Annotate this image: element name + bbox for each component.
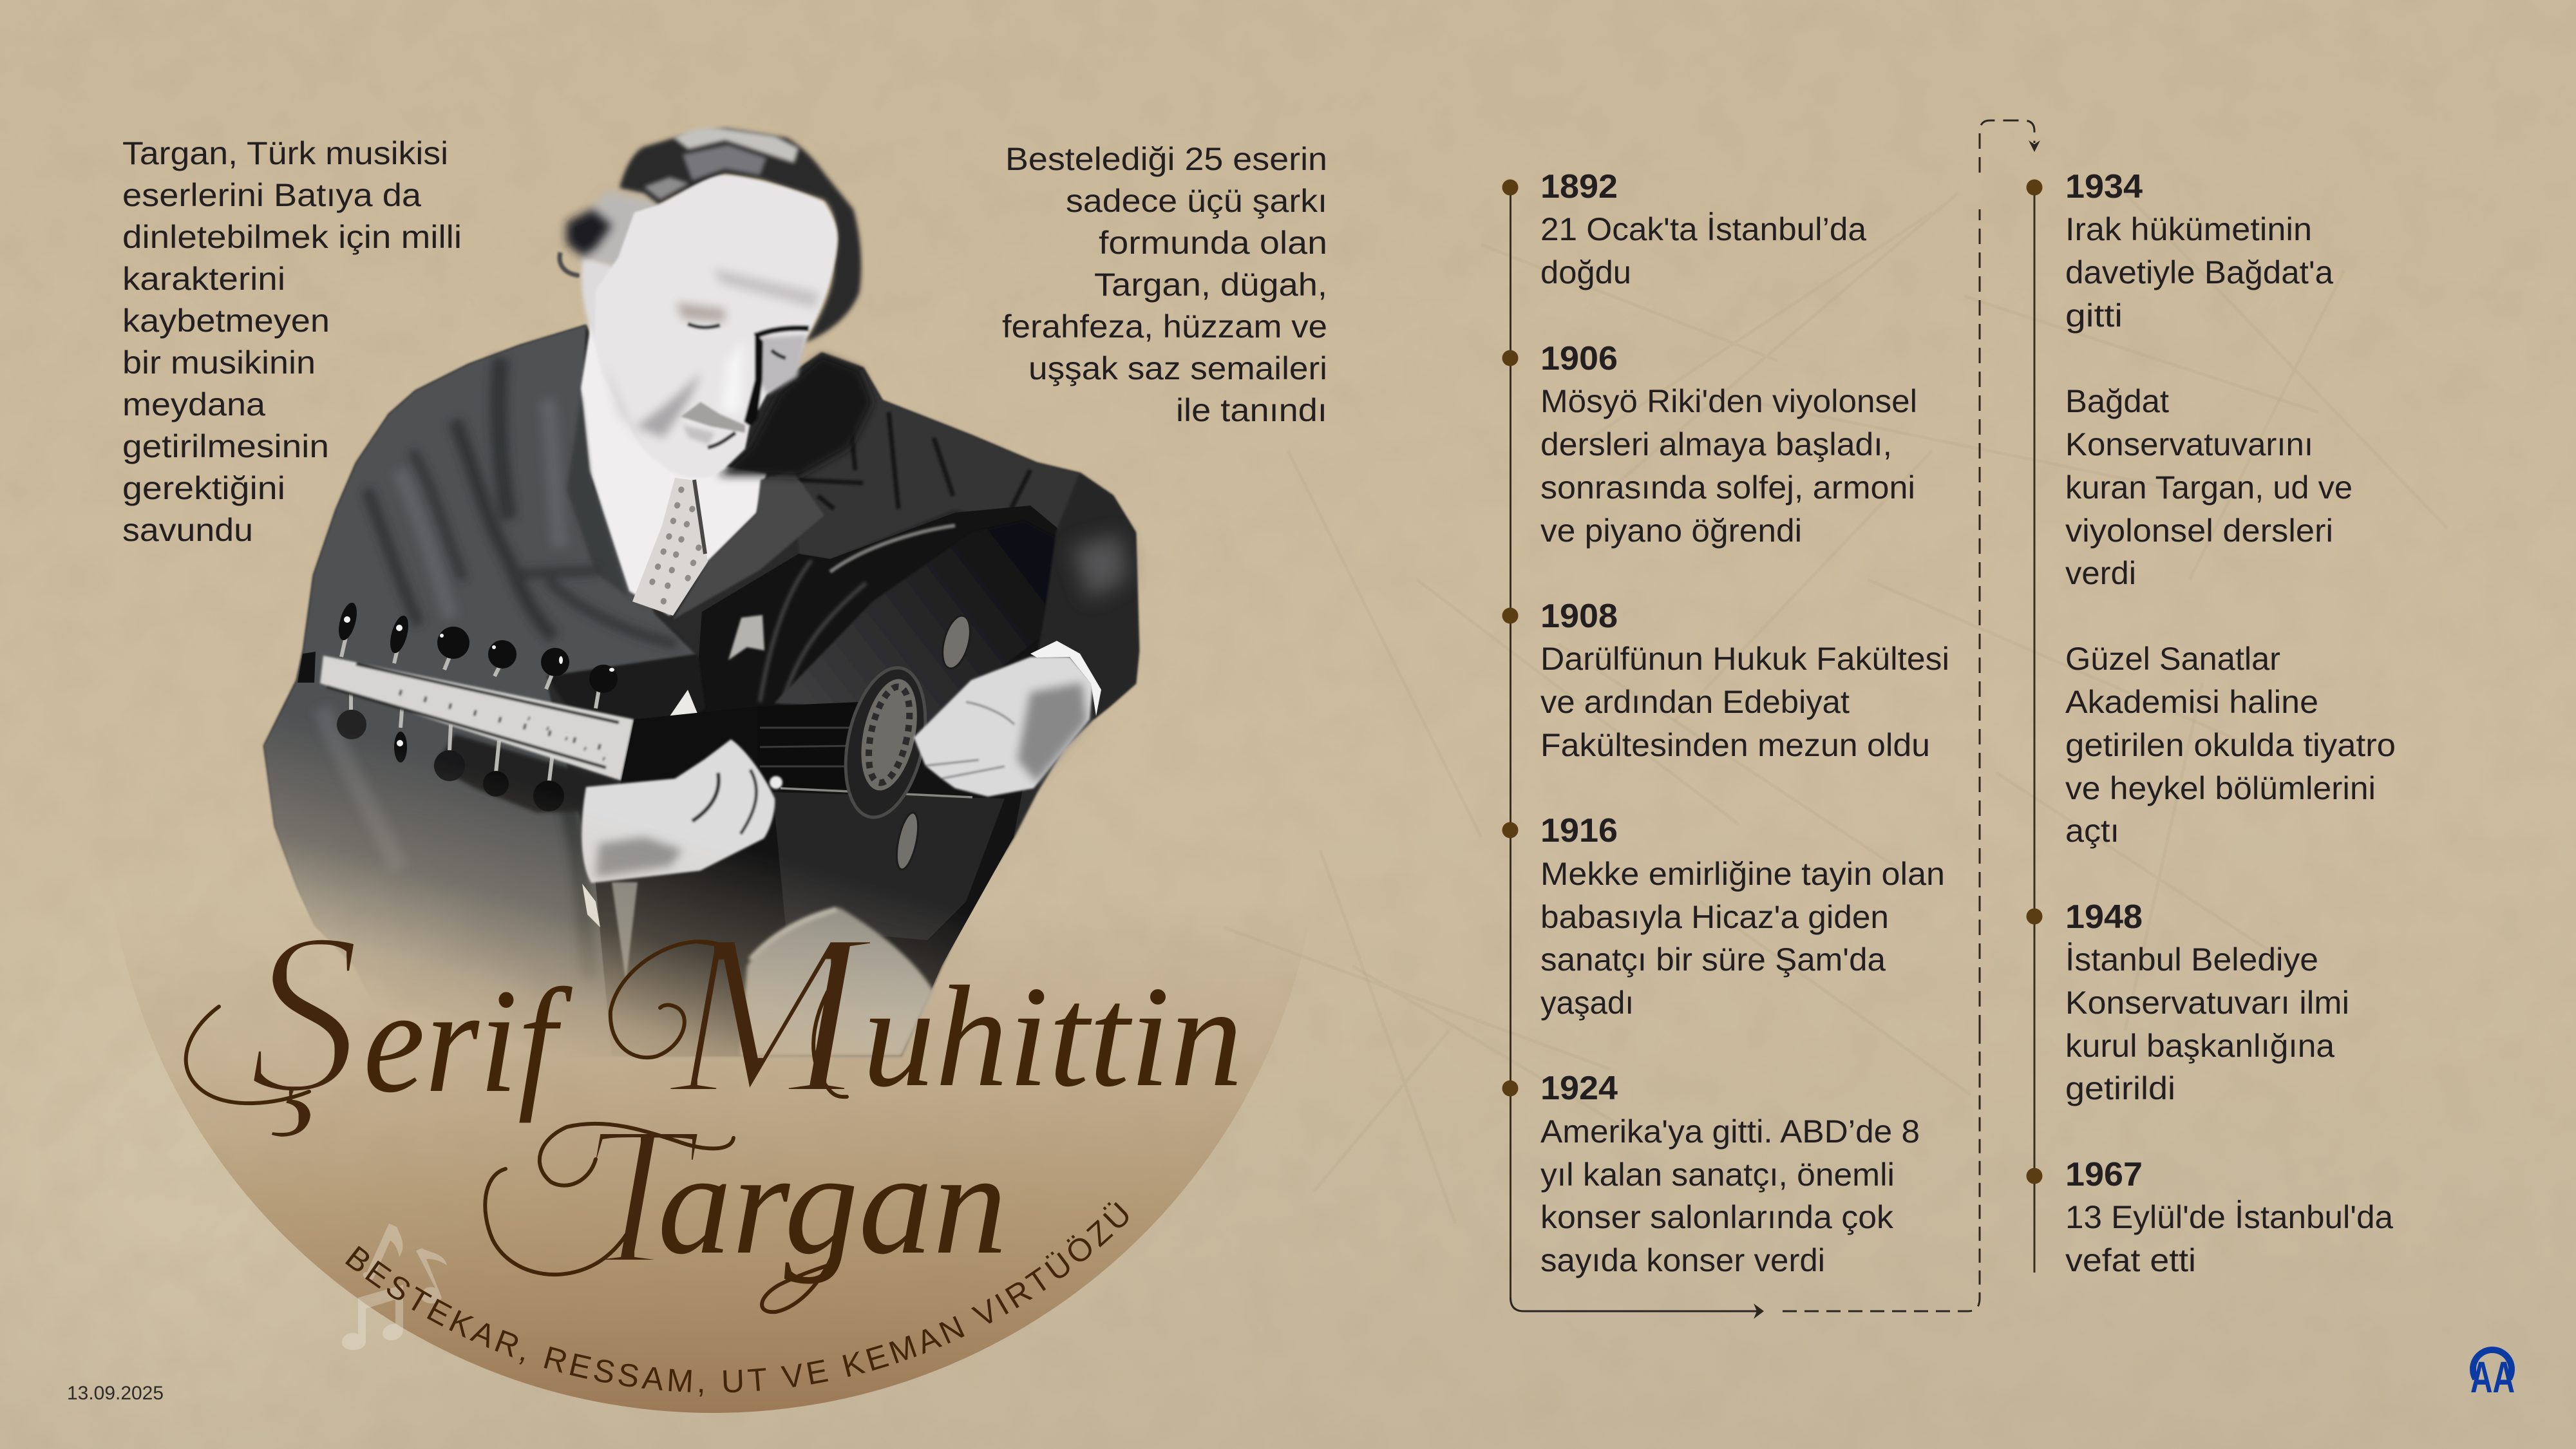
entry 1948: getirildi bbox=[2065, 1070, 2175, 1106]
entry 1892: doğdu bbox=[1540, 254, 1631, 290]
entry 1967: vefat etti bbox=[2065, 1242, 2196, 1278]
entry 1948 bbox=[2065, 898, 2349, 1106]
entry 1967: 13 Eylül'de İstanbul'da bbox=[2065, 1199, 2393, 1235]
entry 1908: Darülfünun Hukuk Fakültesi bbox=[1540, 641, 1949, 677]
entry 1906: sonrasında solfej, armoni bbox=[1540, 469, 1915, 506]
entry 1934: davetiyle Bağdat'a bbox=[2065, 254, 2333, 290]
subtitle on arc: BESTEKAR, RESSAM, UT VE KEMAN VIRTÜÖZÜ bbox=[345, 1202, 1128, 1396]
entry 1934: kuran Targan, ud ve bbox=[2065, 469, 2353, 506]
timeline line 2 bbox=[2034, 187, 2035, 1273]
beamed notes bbox=[342, 1285, 403, 1350]
text block: right quote: Targan, dügah, bbox=[1094, 267, 1327, 303]
face shadow on jacket bbox=[718, 355, 873, 477]
timeline dots 1 bbox=[1502, 179, 1519, 1096]
text block: left quote: eserlerini Batıya da bbox=[122, 177, 421, 213]
grey hair puff bbox=[573, 191, 670, 270]
left sleeve and chest bbox=[264, 325, 698, 1056]
text block: left quote: dinletebilmek için milli bbox=[122, 219, 462, 255]
text block: left quote: getirilmesinin bbox=[122, 428, 329, 464]
text block: left quote: kaybetmeyen bbox=[122, 303, 330, 339]
peg glints bbox=[344, 616, 614, 746]
text block: left quote: karakterini bbox=[122, 261, 285, 297]
sound holes bbox=[893, 613, 975, 871]
timeline dots 2 bbox=[2026, 179, 2043, 1184]
oud peg box bbox=[320, 656, 634, 781]
entry 1916: sanatçı bir süre Şam'da bbox=[1540, 942, 1886, 978]
arrow: timeline connector between columns bbox=[1511, 120, 2040, 1319]
right hand bbox=[914, 657, 1093, 797]
decorative flourishes of the title bbox=[186, 942, 847, 1103]
entry 1908: 1908 bbox=[1540, 598, 1618, 635]
letters argan: argan bbox=[658, 1122, 1007, 1285]
lower oud body bbox=[773, 792, 1005, 940]
entry 1934: açtı bbox=[2065, 813, 2119, 849]
jacket highlights bbox=[322, 399, 560, 869]
nose shadow bbox=[744, 332, 763, 426]
entry 1924: yıl kalan sanatçı, önemli bbox=[1540, 1157, 1895, 1193]
entry 1934: 1934 bbox=[2065, 168, 2143, 205]
jacket folds bbox=[367, 358, 676, 979]
entry 1967: 1967 bbox=[2065, 1156, 2143, 1193]
shirt bbox=[581, 322, 766, 616]
timeline line 1 bbox=[1510, 187, 1511, 1298]
moustache bbox=[681, 402, 745, 433]
peg on far end bbox=[298, 652, 316, 683]
text block: left quote: Targan, Türk musikisi bbox=[122, 135, 448, 171]
oud highlight arc bbox=[830, 526, 955, 572]
right cuff bbox=[1030, 641, 1101, 716]
grey hair highlights bbox=[674, 128, 799, 163]
entry 1934: getirilen okulda tiyatro bbox=[2065, 727, 2396, 763]
white triangle bbox=[668, 690, 699, 718]
entry 1924: Amerika'ya gitti. ABD’de 8 bbox=[1540, 1113, 1920, 1150]
text block: right quote: sadece üçü şarkı bbox=[1066, 183, 1327, 219]
upper right jacket bbox=[797, 368, 1080, 559]
text block: left quote: gerektiğini bbox=[122, 470, 285, 506]
dark area under peg box bbox=[435, 734, 618, 813]
lower lip shading bbox=[683, 425, 715, 444]
single note right bbox=[416, 1248, 447, 1303]
single note left bbox=[363, 1224, 403, 1280]
decorative flourishes of T and g bbox=[485, 1124, 837, 1312]
entry 1924: 1924 bbox=[1540, 1070, 1618, 1107]
entry 1948: Konservatuvarı ilmi bbox=[2065, 985, 2349, 1021]
entry 1916: Mekke emirliğine tayin olan bbox=[1540, 856, 1945, 892]
mouth bbox=[708, 433, 735, 448]
icon: AA logo bbox=[2470, 1350, 2515, 1402]
peg stems bbox=[341, 634, 599, 786]
entry 1934: Güzel Sanatlar bbox=[2065, 641, 2280, 677]
entry 1916 bbox=[1540, 812, 1945, 1021]
entry 1948: 1948 bbox=[2065, 898, 2143, 936]
entry 1934: Akademisi haline bbox=[2065, 684, 2318, 720]
text block: left quote bbox=[122, 135, 462, 548]
chest streaks bbox=[760, 560, 866, 702]
entry 1916: yaşadı bbox=[1540, 985, 1634, 1021]
entry 1948: İstanbul Belediye bbox=[2065, 942, 2318, 978]
entry 1924: konser salonlarında çok bbox=[1540, 1199, 1894, 1235]
letters erif: erif bbox=[363, 958, 573, 1124]
text block: left quote: meydana bbox=[122, 386, 265, 422]
ear bbox=[582, 258, 628, 341]
title: Targan bbox=[485, 1085, 1007, 1312]
knee bbox=[741, 908, 934, 1056]
text block: right quote: formunda olan bbox=[1099, 225, 1327, 261]
right jacket folds bbox=[797, 412, 1030, 509]
coat edge strip bbox=[612, 882, 638, 982]
text block: right quote: ile tanındı bbox=[1176, 392, 1327, 428]
entry 1934: verdi bbox=[2065, 555, 2136, 591]
icon: music notes bbox=[342, 1224, 447, 1350]
timeline column 2 bbox=[2026, 168, 2396, 1278]
entry 1934: Konservatuvarını bbox=[2065, 426, 2313, 462]
icon: AA logo: AA bbox=[2470, 1352, 2515, 1402]
fret neck to left hand shadow bbox=[621, 706, 757, 790]
entry 1934: Bağdat bbox=[2065, 383, 2169, 419]
entry 1906: Mösyö Riki'den viyolonsel bbox=[1540, 383, 1917, 419]
entry 1908: ve ardından Edebiyat bbox=[1540, 684, 1850, 720]
entry 1906 bbox=[1540, 340, 1917, 549]
entry 1934: viyolonsel dersleri bbox=[2065, 513, 2333, 549]
pocket square bbox=[728, 615, 764, 660]
left hand bbox=[582, 739, 782, 883]
letters Ş: Ş bbox=[248, 884, 361, 1142]
letter T: T bbox=[580, 1085, 703, 1306]
entry 1906: dersleri almaya başladı, bbox=[1540, 426, 1892, 462]
entry 1908: Fakültesinden mezun oldu bbox=[1540, 727, 1930, 763]
letters uhittin: uhittin bbox=[862, 956, 1243, 1117]
sleeve highlight bbox=[1072, 535, 1127, 599]
face bbox=[594, 175, 837, 478]
entry 1892: 21 Ocak'ta İstanbul’da bbox=[1540, 211, 1866, 247]
entry 1924 bbox=[1540, 1070, 1920, 1278]
text block: left quote: bir musikinin bbox=[122, 345, 316, 381]
text block: right quote: ferahfeza, hüzzam ve bbox=[1002, 308, 1327, 345]
letter M: M bbox=[666, 885, 876, 1142]
timeline column 1 bbox=[1502, 168, 1949, 1298]
sleeve bbox=[1038, 473, 1139, 719]
right lapel bbox=[673, 470, 824, 620]
oud strings bbox=[753, 702, 972, 797]
entry 1934: Irak hükümetinin bbox=[2065, 211, 2312, 247]
text block: right quote: uşşak saz semaileri bbox=[1028, 350, 1327, 386]
portrait of Şerif Muhittin Targan playing the oud bbox=[264, 128, 1139, 1056]
right eye socket bbox=[757, 335, 806, 394]
entry 1916: 1916 bbox=[1540, 812, 1618, 849]
entry 1906: ve piyano öğrendi bbox=[1540, 513, 1802, 549]
jacket silhouette bbox=[264, 325, 1139, 1056]
entry 1916: babasıyla Hicaz'a giden bbox=[1540, 899, 1889, 935]
entry 1934 bbox=[2065, 168, 2396, 849]
oud body face bbox=[774, 521, 1065, 734]
entry 1948: kurul başkanlığına bbox=[2065, 1028, 2334, 1064]
cuff under left hand bbox=[582, 884, 600, 927]
head bbox=[560, 128, 861, 478]
entry 1934: gitti bbox=[2065, 298, 2123, 334]
tie bbox=[632, 478, 708, 616]
text block: left quote: savundu bbox=[122, 512, 253, 548]
text block: right quote: Bestelediği 25 eserin bbox=[1005, 141, 1327, 177]
date: 13.09.2025 bbox=[67, 1383, 164, 1404]
entry 1924: sayıda konser verdi bbox=[1540, 1242, 1825, 1278]
entry 1892 bbox=[1540, 168, 1866, 290]
entry 1892: 1892 bbox=[1540, 168, 1618, 205]
circular backdrop with brown gradient bbox=[105, 197, 1321, 1413]
hair band bbox=[620, 128, 861, 343]
entry 1908 bbox=[1540, 598, 1949, 763]
peg heads bbox=[336, 601, 618, 811]
left lapel shadow bbox=[567, 393, 654, 615]
entry 1967 bbox=[2065, 1156, 2393, 1278]
rosette bbox=[833, 661, 938, 824]
tuning pegs bbox=[298, 601, 618, 811]
face shading bbox=[605, 269, 819, 444]
eyes and brows bbox=[688, 324, 786, 358]
entry 1934: ve heykel bölümlerini bbox=[2065, 770, 2376, 806]
title: Şerif Muhittin bbox=[186, 884, 1243, 1142]
dark area behind pegs bbox=[547, 654, 705, 728]
entry 1906: 1906 bbox=[1540, 340, 1618, 377]
black chest and oud outer edge bbox=[596, 506, 1069, 1056]
text block: right quote bbox=[1002, 141, 1327, 428]
